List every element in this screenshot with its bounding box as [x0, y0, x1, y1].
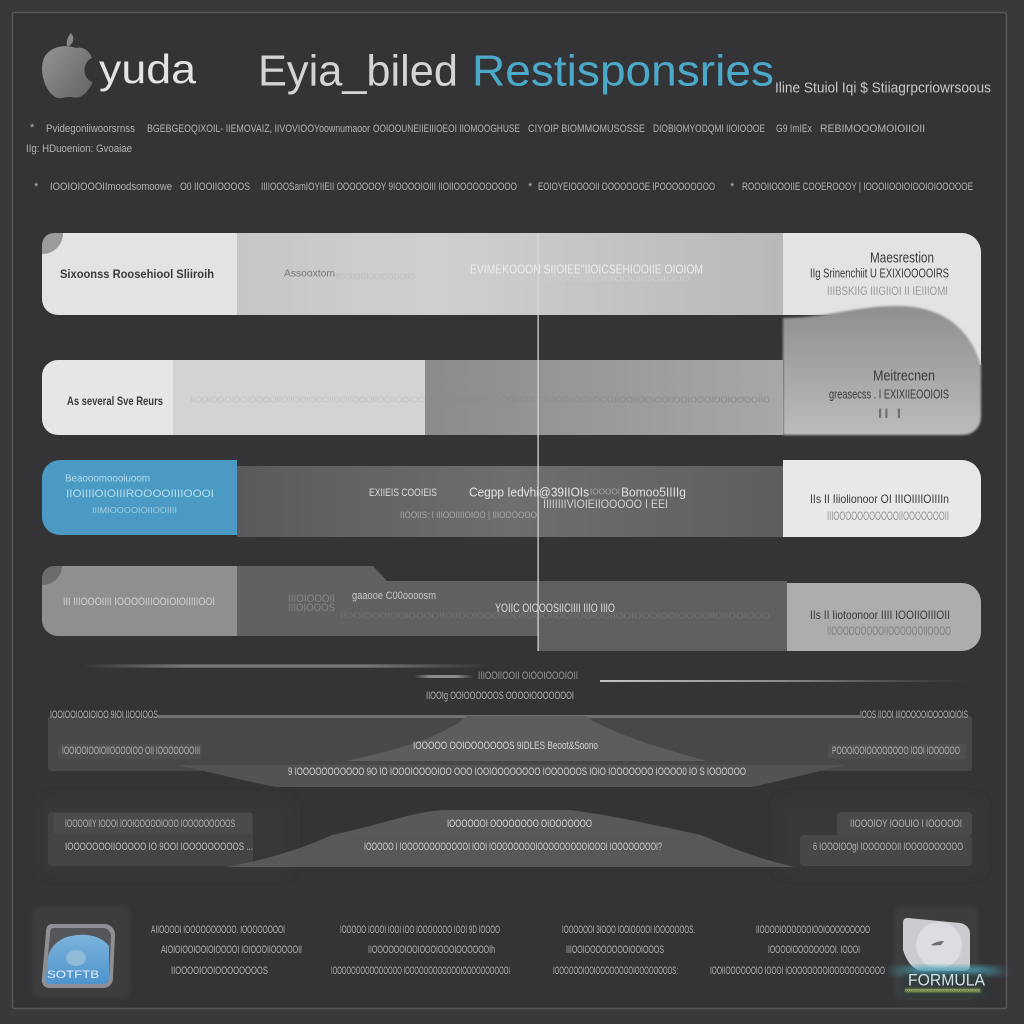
badge body [42, 924, 115, 988]
row 4 labels: gaaooe C00oooosm [352, 590, 436, 602]
row 3 labels: IOOOOI [590, 488, 620, 496]
footer text columns: AIOIOIOOIOOIOIOOOOI IOIOOOIIOOOOOII [161, 944, 302, 956]
footer text columns: IOOOOOOOOOOOOOOO IOOOOOOOOOOOOIOOOOOOOOOOI [331, 965, 510, 977]
row 4 labels: YOIIC OIOOOSIICIIII IIIO IIIO [495, 601, 615, 615]
footer text columns [151, 924, 885, 977]
row 1 labels [60, 250, 949, 298]
row 1 labels: IIIBSKIIG IIIGIIOI II IEIIIOMI [827, 284, 948, 298]
row 1 labels: Assooxtom [284, 268, 335, 280]
row 3 right cell [783, 460, 981, 537]
row 3 labels: Beaooomoooiuoom [65, 474, 150, 484]
panel: lower diagram 2 [40, 800, 980, 872]
diagram 2 labels: IIOOOIOY IOOUIO I IOOOOOI [850, 818, 962, 830]
diagram 2 labels: IOOOOOOOIIOOOOO IO 9OOI IOOOOOOOOOS ... [65, 841, 253, 853]
section subcaption: IIOOIg OOIOOOOOOS OOOOIOOOOOOOI [426, 690, 574, 702]
row 1 labels: EVIMEKOOON SIIOIEE"IIOICSEHIOOIIE OIOIOM [470, 262, 703, 276]
row 3 labels: IIOOIIS: I IIIOOIIIIOIOO | IIIOOOOOO [400, 510, 537, 520]
footer text columns: AIIOOOOI IOOOOOOOOOO. IOOOOOOOOI [151, 924, 285, 936]
row 4 labels: IIOOIOOOIOOIOOOOIIOIIOOIOOOIIOOIIOOOIIOOIIOOIOOIIOOIOOOIOOIOOOOIIOIIOOIOOO [340, 612, 770, 620]
panel: row 1 [42, 233, 981, 365]
row 1 second cell [237, 233, 425, 315]
row 2 second cell [173, 360, 425, 435]
badge dial mark [931, 941, 944, 945]
header: logo and titles [42, 33, 991, 98]
diagram 1 right pill [828, 744, 966, 759]
intro text block: G9 ImIEx [776, 123, 812, 135]
diagram 2 labels [65, 818, 963, 853]
intro text block: CIYOIP BIOMMOMUSOSSE [528, 123, 645, 135]
diagram 1 left pill [58, 744, 202, 759]
diagram 1 labels: IOOIOOIOOIOIOO 9IOI IIOOIOOS [50, 709, 158, 721]
row 1 left cell [42, 233, 237, 315]
diagram 1 hump [345, 716, 707, 761]
footer text columns: IIOOOOIOOOOOOIOOIOOOOOOOOO [756, 924, 870, 936]
row 4 corner tab [42, 566, 62, 585]
row 3 labels: Cegpp Iedvhi@39IIOIs [469, 484, 589, 500]
badge backing [32, 906, 130, 998]
logo wordmark: yuda [99, 46, 196, 92]
row 1 third cell [425, 233, 783, 315]
row 2 left cell [42, 360, 173, 435]
row 1 labels: IIOOIIOOIOOIOOOOIIO [335, 272, 415, 282]
row 4 right cell [787, 583, 981, 651]
row 3 labels: IIIOOOOOOOOOOOIIOOOOOOOII [827, 509, 949, 523]
badge label: SOTFTB [47, 969, 99, 981]
row 1 labels: IIOOIIOOOIOOIOOOOIIOIIOOIOOOIIOOIIOOO [470, 274, 690, 284]
row 4 mid-left cell with notch [237, 566, 538, 636]
intro text block: IIIIOOOSamIOYIIEII OOOOOOOY 9IOOOOIOIII IIOIIOOOOOOOOOO [261, 181, 517, 193]
diagram 2 labels: IOOOOO I IOOOOOOOOOOOOI IOOI IOOOOOOOOIOOOOOOOOOIOOOI IOOOOOOOOI? [364, 841, 662, 853]
badge inner blue [46, 935, 109, 984]
badge backing [893, 907, 979, 1000]
diagram 2 glow left [40, 800, 290, 872]
row 4 left cell [42, 566, 237, 636]
row 2 labels: greasecss . I EXIXIIEOOIOIS [829, 386, 949, 402]
row 1 labels: IIg Srinenchiit U EXIXIOOOOIRS [810, 266, 949, 280]
diagram 1 top line [158, 715, 860, 718]
badge dial [916, 922, 962, 968]
row 3 labels: IIOIIIIOIOIIIROOOOIIIIOOOI [66, 488, 214, 500]
diagram 2 lower trapezoid [226, 835, 795, 867]
footer text columns: IOOIIOOOOOOIO IOOOI IOOOOOOOOIOOOOOOOOOOO [710, 965, 885, 977]
diagram 1 labels [50, 709, 968, 778]
row 3 labels: Bomoo5IIIIg [621, 484, 686, 500]
row 3 labels: IIIMIOOOOIOIIOOIIII [92, 505, 177, 515]
intro text block: BGEBGEOQIXOIL- IIEMOVAIZ, IIVOVIOOYoownumaoor [147, 123, 370, 135]
row 2 right cell with curved top [783, 306, 981, 435]
row 4 labels: IIOOOOOOOOOIIOOOOOOIIOOOO [827, 624, 951, 638]
intro text block: * [30, 122, 35, 134]
row 2 labels: IIOOIOOOIOOIOOOOIIOIIOOIOOOIIOOIIOOOIIOOIIOOIOOIIOOIOOOIOOIOOOOIIO [425, 396, 770, 404]
footer text columns: IOOOOOOIOOIOOOOOOOOIOOOOOOOOS: [553, 965, 678, 977]
divider line right [600, 680, 970, 682]
row 4 labels: IIs II Iiotoonoor IIII IOOIIOIIIOII [810, 608, 950, 622]
intro text block: Pvidegoniiwoorsrnss [46, 123, 135, 135]
row 1 corner tab [42, 233, 63, 254]
badge highlight [66, 950, 86, 966]
row 2 third cell [425, 360, 783, 435]
diagram 2 labels: IOOOOIIY IOOOI IOOIOOOOOIOOO IOOOOOOOOOS [65, 818, 235, 830]
row 3 mid cell [237, 466, 783, 537]
intro text block: EOIOYEIOOOOII OOOOOOOE IPOOOOOOOOO [538, 181, 715, 193]
diagram 2 left box [48, 812, 253, 866]
intro text block: DIOBIOMYODQMI IIOIOOOE [653, 123, 765, 135]
icon: apple logo [42, 33, 92, 98]
diagram 2 right box [800, 835, 972, 866]
footer text columns: IOOOOIOOOOOOOOI. IOOOI [768, 944, 860, 956]
badge backdrop [902, 973, 986, 997]
intro text block: * [528, 181, 533, 193]
intro text block: IIg: HDuoenion: Gvoaiae [26, 143, 132, 155]
main title: Eyia_biled [258, 46, 458, 96]
intro text block: IOOIOIOOOIImoodsomoowe [50, 181, 172, 193]
row 2 labels: IIOOIOOOIOOIOOOOIIOIIOOIOOOIIOOIIOOOIIOOIIOOIOO [190, 396, 425, 404]
section caption: IIIOOIIOOII OIOOIOOOIOII [478, 670, 578, 682]
intro text block: OOIOOUNEIIEIIIOEOI IIOMOOGHUSE [373, 123, 520, 135]
row 4 mid-right cell [538, 581, 787, 651]
row 2 labels: As several Sve Reurs [67, 394, 163, 408]
row 2 labels: Meitrecnen [873, 368, 935, 384]
diagram 2 right pill [837, 812, 972, 836]
badge label: FORMULA [908, 970, 986, 990]
divider tick [414, 675, 474, 678]
row 3 labels: IIIIIIIIVIOIEIIOOOOO I EEI [543, 497, 668, 511]
panel: row 2 [42, 306, 981, 435]
row 2 labels [67, 368, 949, 421]
row 3 labels: EXIIEIS COOIEIS [369, 487, 437, 499]
intro text block: * [730, 181, 735, 193]
footer text columns: IOOOOOOI 3IOOO IOOIOOOOI IOOOOOOOS. [562, 924, 695, 936]
footer text columns: IIOOOOIOOIOOOOOOOOS [171, 965, 268, 977]
row 3 labels [65, 474, 949, 523]
main title accent: Restisponsries [472, 46, 774, 96]
panel: row 3 [42, 460, 981, 537]
diagram 2 glow right [780, 800, 980, 872]
row 4 labels [63, 590, 951, 638]
diagram 2 labels: IOOOOOOI OOOOOOOO OIOOOOOOO [447, 818, 592, 830]
panel: lower diagram 1 [48, 709, 972, 787]
badge sublabel: COOOOOOOOOOOOOOOOOOOOOOOOOOOOOOOO [905, 988, 980, 992]
diagram 1 labels: IOOIOOIOOIOIIOOOOIOO OII IOOOOOOOIII [62, 745, 200, 757]
row 1 labels: Maesrestion [870, 250, 934, 266]
footer text columns: IIIOOIOOOOOOOOIOOIOOOS [566, 944, 664, 956]
diagram 1 base [48, 716, 972, 771]
divider glow left [80, 664, 490, 668]
row 3 labels: IIs II Iiiolionoor OI IIIOIIIIOIIIIn [810, 492, 949, 506]
green underglow [905, 988, 981, 993]
footer: left badge [32, 906, 130, 998]
diagram 2 upper hump [332, 810, 701, 835]
intro text block: REBIMOOOMOIOIIOII [820, 123, 925, 135]
teal glow [885, 966, 1010, 976]
intro text block: O0 IIOOIIOOOOS [180, 181, 250, 193]
footer text columns: IIOOOOOOIOOIOOOIOOOIOOOOOOIh [368, 944, 495, 956]
row 4 labels: IIIOIOOOII [288, 593, 335, 605]
badge body [903, 918, 970, 971]
row 1 right cell [783, 233, 981, 365]
panel: row 4 [42, 566, 981, 651]
vertical divider line [538, 233, 539, 651]
diagram 2 left pill [54, 813, 252, 834]
row 3 blue cell [42, 460, 237, 535]
header tagline: Iline Stuiol Iqi $ Stiiagrpcriowrsoous [775, 80, 991, 96]
row 1 labels: Sixoonss Roosehiool Sliiroih [60, 267, 214, 281]
row 2 labels: II I [877, 405, 902, 421]
intro text block [26, 122, 973, 193]
badge dark inner [46, 928, 111, 978]
row 4 labels: III IIIOOOIIII IOOOOIIIOOIOIOIIIIIOOI [63, 596, 215, 608]
footer text columns: IOOOOO IOOOI IOOI IOO IOOOOOOO IOOI 9D IOOOO [340, 924, 500, 936]
footer: right badge [885, 907, 1010, 1000]
diagram 1 labels: 9 IOOOOOOOOOOO 9O IO IOOOIOOOOIOO OOO IOOIOOOOOOOO IOOOOOOS IOIO IOOOOOOO IOOOO0 IO S IOOOOOO [288, 766, 746, 778]
diagram 1 labels: IOOOOO OOIOOOOOOOS 9IDLES Beoot&Soono [413, 740, 598, 752]
intro text block: * [34, 181, 39, 193]
diagram 1 band [176, 765, 845, 787]
row 4 labels: IIIOIOOOS [288, 602, 335, 614]
